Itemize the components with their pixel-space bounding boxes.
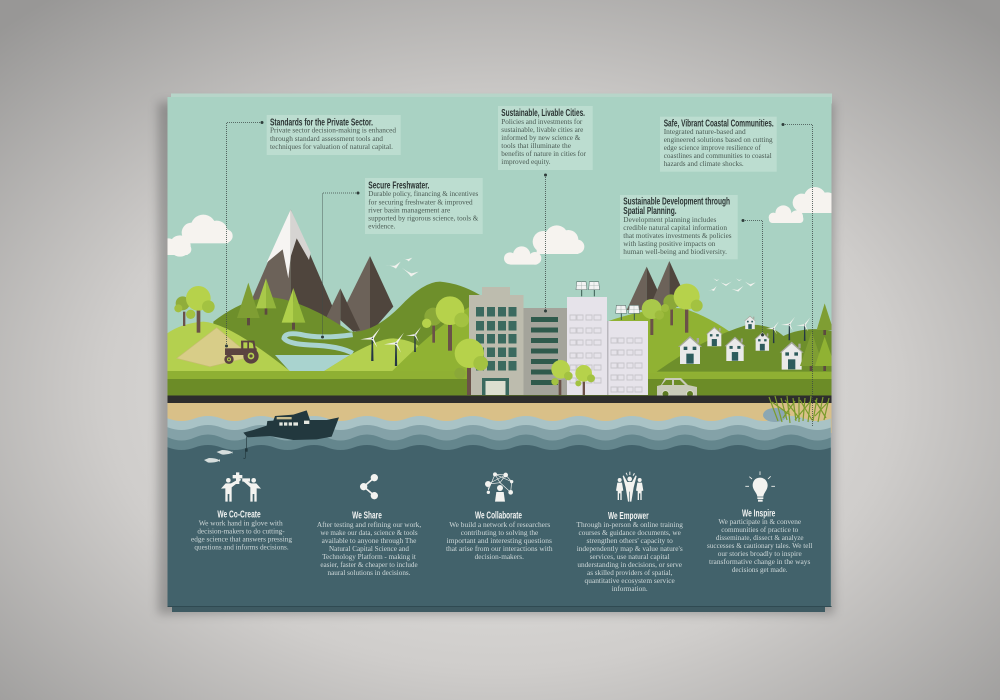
text: We Collaborate: We Collaborate	[475, 510, 522, 522]
cloud: right	[769, 187, 837, 223]
cloud: left	[160, 215, 233, 257]
building: tall office	[469, 287, 524, 395]
text: We Share: naural solutions in decisions.	[328, 568, 411, 577]
text: We Empower: We Empower	[608, 510, 649, 522]
icon: empower	[616, 472, 643, 502]
callout: Sustainable, Livable Cities: tools that illuminate the	[501, 141, 572, 150]
cloud: city	[504, 225, 584, 265]
solar panels	[576, 282, 640, 320]
text: We Collaborate: decision-makers.	[475, 552, 524, 561]
houses	[678, 316, 804, 370]
text: We Inspire	[707, 508, 813, 574]
text: We Empower: Through in-person & online training	[577, 520, 683, 529]
boat	[243, 410, 339, 459]
trees: by the buildings	[422, 296, 469, 351]
windmills: right	[766, 317, 810, 343]
callout: Standards for the Private Sector: Standards for the Private Sector.	[270, 116, 373, 128]
text: We Empower: quantitative ecosystem service	[585, 576, 675, 585]
hill: dark green back	[213, 282, 480, 373]
trees: far left	[174, 286, 215, 333]
paper shadow	[158, 102, 834, 614]
icon: co-create	[221, 472, 261, 502]
text: We Share: After testing and refining our work,	[317, 520, 421, 529]
text: We Empower: information.	[612, 584, 648, 593]
hill: light left	[165, 322, 291, 372]
text: We Collaborate	[446, 510, 553, 561]
pine trees	[237, 278, 305, 330]
callout: Sustainable Development through Spatial Planning: with lasting positive impacts on	[623, 239, 715, 248]
callout: Safe, Vibrant Coastal Communities: Safe, Vibrant Coastal Communities.	[664, 118, 774, 130]
callout: Secure Freshwater: Secure Freshwater.	[368, 180, 429, 192]
birds: left	[385, 258, 419, 277]
text: We Collaborate: important and interesting questions	[447, 536, 552, 545]
text: We Co-Create: questions and informs decisions.	[194, 542, 289, 551]
trees: front of buildings	[454, 339, 595, 395]
text: We Collaborate: that arise from our interactions with	[446, 544, 553, 553]
text: We Empower: independently map & value nature's	[577, 544, 683, 553]
callout: Sustainable, Livable Cities: Sustainable, Livable Cities.	[501, 107, 585, 119]
mountains: right of snow peak	[327, 256, 393, 333]
text: We Share: Natural Capital Science and	[329, 544, 409, 553]
building: white tower	[567, 297, 609, 395]
farm field	[177, 328, 252, 367]
text: We Share: available to anyone through The	[322, 536, 417, 545]
callout: Safe, Vibrant Coastal Communities: hazards and climate shocks.	[664, 159, 744, 168]
text: We Inspire: We participate in & convene	[718, 517, 802, 526]
tractor	[224, 341, 259, 364]
text: We Inspire: communities of practice to	[721, 525, 798, 534]
bottom edge	[167, 606, 832, 608]
text: We Collaborate: We build a network of researchers	[449, 520, 550, 529]
callout: Sustainable Development through Spatial Planning: Development planning includes	[623, 215, 716, 224]
leader lines	[225, 121, 812, 426]
text: We Empower: as skilled providers of spatial,	[587, 568, 672, 577]
mountain: snow peak	[252, 210, 332, 320]
text: We Collaborate: contributing to solving the	[461, 528, 539, 537]
left landscape	[160, 209, 480, 373]
road	[167, 396, 832, 403]
callout: Standards for the Private Sector: Private sector decision-making is enhanced	[270, 126, 396, 135]
callout: Sustainable, Livable Cities: benefits of nature in cities for	[501, 149, 586, 158]
text: We Empower: strengthen others' capacity to	[587, 536, 673, 545]
birds: right	[708, 278, 756, 292]
callout: Safe, Vibrant Coastal Communities: engineered solutions based on cutting	[664, 135, 773, 144]
back sheet	[171, 94, 832, 612]
callout: Standards for the Private Sector: techniques for valuation of natural capital.	[270, 142, 393, 151]
callout: Sustainable Development through Spatial Planning: credible natural capital information	[623, 223, 727, 232]
text: We Co-Create: edge science that answers pressing	[191, 534, 292, 543]
hills: right lower	[323, 307, 470, 372]
text: We Share	[317, 510, 421, 577]
waves	[168, 416, 831, 606]
text: We Empower: services, use natural capital	[590, 552, 670, 561]
callout: Secure Freshwater	[365, 178, 483, 234]
river and lake	[275, 334, 353, 372]
text: We Inspire: decisions get made.	[732, 565, 788, 574]
text: We Co-Create	[191, 509, 292, 551]
car	[657, 378, 697, 396]
beach sand	[167, 403, 832, 433]
text: We Co-Create: We work hand in glove with	[199, 518, 283, 527]
buildings	[469, 282, 648, 395]
callout: Safe, Vibrant Coastal Communities: coastlines and communities to coastal	[664, 151, 772, 160]
callout: Sustainable Development through Spatial Planning: human well-being and biodiversity.	[623, 247, 727, 256]
callout: Secure Freshwater: for securing freshwater & improved	[368, 197, 473, 206]
text: We Inspire: successes & cautionary tales. We tell	[707, 541, 813, 550]
callout: Secure Freshwater: Durable policy, financing & incentives	[368, 189, 478, 198]
text: We Co-Create: We Co-Create	[217, 509, 261, 521]
windmills: left	[360, 327, 421, 366]
building: striped office	[524, 308, 568, 395]
callout: Secure Freshwater: evidence.	[368, 221, 395, 230]
sky	[168, 97, 832, 336]
text: We Co-Create: decision-makers to do cutting-	[197, 526, 285, 535]
poster	[142, 97, 837, 620]
callout: Safe, Vibrant Coastal Communities: edge science improve resilience of	[664, 143, 761, 152]
callout: Secure Freshwater: supported by rigorous science, tools &	[368, 213, 478, 222]
building: white block	[608, 321, 648, 395]
icon: share	[360, 474, 378, 499]
right landscape	[504, 187, 837, 373]
text: We Share: we make our data, science & tools	[320, 528, 418, 537]
hill: mid green	[608, 308, 730, 371]
callout: Safe, Vibrant Coastal Communities: Integrated nature-based and	[664, 127, 746, 136]
text: We Inspire: disseminate, dissect & analyze	[716, 533, 804, 542]
text: We Inspire: transformative change in the ways	[709, 557, 810, 566]
icon: collaborate	[485, 472, 513, 502]
text: We Share: We Share	[352, 510, 382, 522]
hill: dark right	[657, 325, 837, 372]
text: We Share: Technology Platform - making it	[322, 552, 417, 561]
text: We Empower: understanding in decisions, or serve	[577, 560, 683, 569]
mountains: distant	[626, 261, 680, 310]
callout: Sustainable, Livable Cities: informed by new science &	[501, 133, 580, 142]
callout: Sustainable, Livable Cities	[498, 106, 593, 170]
ground bands	[167, 371, 832, 396]
callout: Sustainable, Livable Cities: sustainable, livable cities are	[501, 125, 584, 134]
text: We Empower	[577, 510, 683, 593]
callout: Sustainable Development through Spatial Planning: Sustainable Development through	[623, 195, 730, 207]
text: We Share: easier, faster & cheaper to include	[320, 560, 418, 569]
callout: Sustainable Development through Spatial Planning	[620, 195, 738, 259]
trees: behind houses	[642, 284, 703, 335]
callout: Standards for the Private Sector	[267, 115, 401, 155]
fish	[204, 450, 232, 463]
callout: Safe, Vibrant Coastal Communities	[660, 117, 777, 172]
text: We Inspire: our stories broadly to inspire	[718, 549, 802, 558]
reeds	[763, 396, 829, 423]
callout: Sustainable, Livable Cities: Policies and investments for	[501, 117, 583, 126]
text: We Empower: courses & guidance documents, we	[579, 528, 681, 537]
callout: Secure Freshwater: river basin management are	[368, 205, 451, 214]
callout: Sustainable Development through Spatial Planning: Spatial Planning.	[623, 205, 677, 217]
callout: Sustainable Development through Spatial Planning: that motivates investments & policies	[623, 231, 732, 240]
icon: inspire	[745, 471, 775, 502]
callout: Sustainable, Livable Cities: improved equity.	[501, 157, 551, 166]
callout: Standards for the Private Sector: through standard assessment tools and	[270, 134, 383, 143]
text: We Inspire: We Inspire	[742, 508, 775, 520]
pine trees: right	[800, 304, 832, 371]
